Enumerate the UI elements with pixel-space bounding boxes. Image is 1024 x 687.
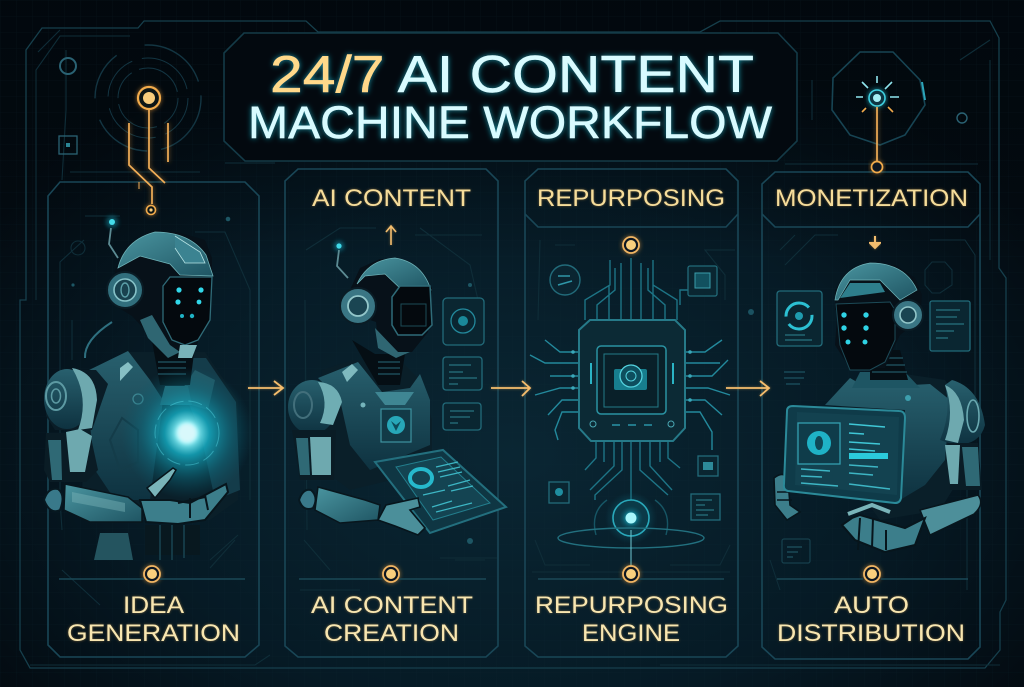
panel: idea generation: [44, 182, 259, 657]
label: idea generation: [67, 592, 240, 647]
emblem: top right monetization node: [832, 52, 925, 172]
icon cards: monetization: [777, 291, 970, 563]
arrow: down: [870, 236, 880, 248]
robot: idea generation: [44, 216, 253, 560]
arrow: repurposing to distribution: [726, 381, 769, 396]
top label: repurposing: REPURPOSING: [537, 185, 725, 212]
top label: ai content: AI CONTENT: [312, 185, 471, 212]
icon: ring left: [60, 58, 76, 74]
title panel: [224, 33, 797, 161]
panel: repurposing engine: [525, 169, 738, 657]
top label: monetization: MONETIZATION: [775, 185, 968, 212]
icon cards: ai content: [443, 298, 484, 430]
arrow: content to repurposing: [491, 381, 530, 396]
title text: 24/7 AI CONTENT: [270, 46, 754, 104]
panel: ai content creation: [285, 169, 506, 657]
node: auto distribution: [864, 566, 880, 582]
label: ai content creation: AI CONTENT: [311, 592, 473, 619]
label: auto distribution: AUTO: [834, 592, 909, 619]
icons: repurposing: [549, 265, 720, 520]
label: auto distribution: DISTRIBUTION: [777, 620, 965, 647]
title text: MACHINE WORKFLOW: [248, 97, 773, 148]
arrow: up: [386, 226, 396, 245]
chip diagram: [530, 258, 730, 566]
robot: auto distribution: [774, 263, 985, 552]
node: repurposing engine: [623, 566, 639, 582]
label: repurposing engine: REPURPOSING: [535, 592, 728, 619]
emblem: top left lightbulb node: [95, 45, 201, 214]
panel: auto distribution: [748, 172, 985, 659]
node: ai content creation: [383, 566, 399, 582]
label: ai content creation: [311, 592, 473, 647]
tablet: [375, 450, 506, 533]
robot: ai content: [288, 241, 506, 535]
node: top: [623, 237, 639, 253]
icon: ring right: [957, 113, 967, 123]
icon: square left: [59, 136, 77, 154]
label: ai content creation: CREATION: [324, 620, 459, 647]
label: auto distribution: [777, 592, 965, 647]
arrow: idea to content: [248, 381, 283, 395]
title text: [248, 46, 773, 148]
tablet: [784, 406, 905, 503]
label: repurposing engine: [535, 592, 728, 647]
label: idea generation: IDEA: [123, 592, 185, 619]
node: idea generation: [144, 566, 160, 582]
label: repurposing engine: ENGINE: [582, 620, 680, 647]
label: idea generation: GENERATION: [67, 620, 240, 647]
